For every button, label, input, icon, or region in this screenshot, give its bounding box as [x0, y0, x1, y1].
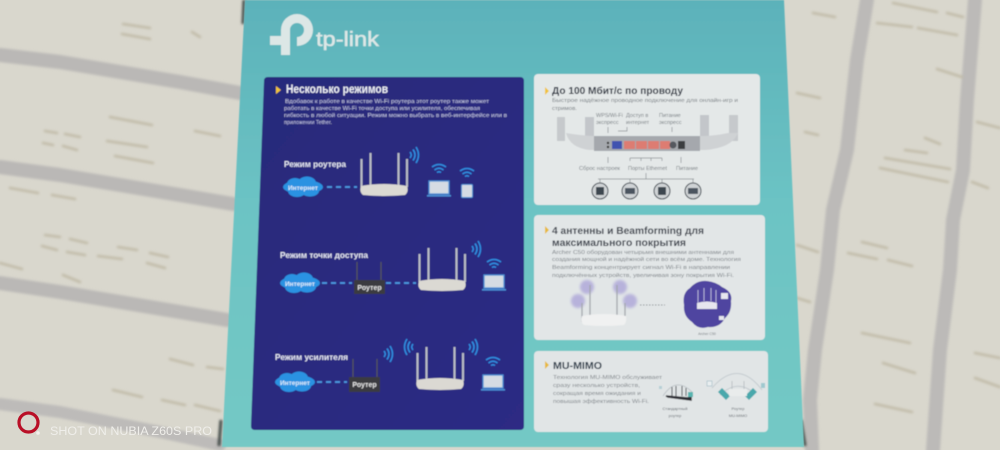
icon: internet cloud: Интернет — [285, 281, 315, 288]
diagram: router back panel — [557, 115, 738, 151]
watermark: shot on nubia — [19, 413, 212, 438]
icon: wifi over tablet — [460, 168, 474, 176]
diagram: standard router: роутер — [669, 413, 682, 418]
wordmark: tp-link — [316, 29, 380, 51]
text: MU-MIMO description: сокращая время ожидания и — [553, 391, 641, 397]
text: beamforming description: Beamforming концентрирует сигнал Wi-Fi в направлении — [552, 265, 730, 271]
text: modes description — [284, 99, 507, 126]
icon: white router — [416, 347, 464, 390]
text: beamforming description: создания мощной и надёжной сети во всём доме. Технология — [552, 256, 741, 263]
callouts: port labels: Питание — [676, 166, 698, 172]
icon: laptop — [481, 375, 505, 391]
diagram: router mode — [283, 147, 474, 198]
caption: standard router: Стандартный — [663, 406, 687, 411]
diagram: MU-MIMO router — [707, 373, 765, 418]
heading: antennas and beamforming — [552, 225, 704, 249]
text: beamforming description — [552, 250, 741, 279]
heading: MU-MIMO: MU-MIMO — [553, 360, 602, 372]
label: access point mode: Режим точки доступа — [280, 250, 368, 260]
diagram: MU-MIMO router: MU-MIMO — [729, 413, 747, 418]
caption: MU-MIMO router: Роутер — [732, 406, 745, 411]
diagram: access point mode — [280, 241, 506, 294]
icon: internet cloud: Интернет — [288, 185, 318, 192]
icon: internet cloud: Интернет — [280, 380, 310, 387]
watermark text: SHOT ON NUBIA Z60S PRO — [50, 426, 212, 438]
icon: tablet — [462, 184, 472, 198]
text: beamforming description: подключённых устройств, увеличивая зону покрытия Wi-Fi. — [552, 272, 734, 279]
icon: wifi over laptop — [432, 164, 446, 172]
callouts: port labels: Порты Ethernet — [628, 166, 667, 172]
icon: signal waves toward white router — [404, 339, 413, 355]
callouts: port labels: интернет — [626, 120, 650, 126]
logo: tp-link — [270, 14, 380, 55]
label: extender mode: Режим усилителя — [275, 352, 348, 362]
callouts: port labels: Сброс настроек — [579, 166, 621, 172]
icon: signal waves to laptop — [469, 339, 478, 355]
icon: yellow bullet — [545, 361, 549, 369]
heading: antennas and beamforming: максимального покрытия — [552, 237, 686, 249]
icon: internet cloud — [275, 372, 315, 392]
text: beamforming description: Archer C50 оборудован четырьмя внешними антеннами для — [552, 250, 734, 256]
panel: antennas and beamforming — [534, 215, 765, 340]
icon: internet cloud — [280, 272, 320, 293]
callouts: port labels: экспресс — [659, 120, 682, 126]
icons: device circles — [592, 183, 701, 199]
text: wired description — [552, 97, 738, 112]
label: router mode: Режим роутера — [284, 159, 346, 169]
icon: black router — [354, 262, 385, 294]
callouts: port labels: Питание — [659, 113, 681, 119]
icon: laptop — [427, 181, 451, 197]
icon: white router — [418, 248, 466, 291]
caption: Archer C50: Archer C50 — [698, 332, 716, 336]
icon: red ring — [19, 413, 40, 435]
text: MU-MIMO description: Технология MU-MIMO обслуживает — [553, 375, 662, 381]
diagram: purple coverage blob — [684, 281, 731, 336]
icon: black router: Роутер — [352, 382, 377, 389]
callouts: port labels: Доступ в — [626, 113, 648, 119]
icon: laptop — [482, 275, 506, 291]
text: wired description: Быстрое надёжное проводное подключение для онлайн-игр и — [552, 97, 738, 104]
icon: signal waves — [472, 241, 480, 257]
text: MU-MIMO description — [553, 375, 662, 405]
teal product box — [222, 0, 804, 447]
callouts: port labels: экспресс — [596, 120, 619, 126]
text: MU-MIMO description: сразу несколько устройств, — [553, 382, 640, 389]
text: modes description: гибкость в любой ситуации. Режим можно выбрать в веб-интерфейсе или в — [284, 112, 507, 119]
icon: router — [360, 153, 408, 196]
text: modes description: приложении Tether. — [284, 120, 332, 126]
icon: wifi over laptop — [486, 358, 500, 366]
callouts: port labels — [579, 113, 698, 183]
callouts: port labels: WPS/Wi-Fi — [596, 113, 623, 119]
heading: wired speed: До 100 Мбит/с по проводу — [552, 85, 683, 97]
icon: yellow bullet — [545, 226, 549, 234]
text: wired description: стримов. — [552, 106, 577, 112]
diagram: standard router — [659, 385, 693, 418]
icon: black router: Роутер — [357, 285, 382, 292]
icon: yellow bullet — [276, 86, 281, 94]
icon: tp-link mark — [270, 14, 313, 55]
text: MU-MIMO description: повышая эффективность Wi-Fi. — [553, 399, 649, 405]
heading: antennas and beamforming: 4 антенны и Beamforming для — [552, 225, 704, 237]
icon: signal waves from black router — [384, 346, 392, 362]
diagram: router with signal spheres — [571, 280, 637, 326]
text: modes description: Вдобавок к работе в качестве Wi-Fi роутера этот роутер также может — [285, 99, 489, 105]
icon: internet cloud — [283, 176, 323, 197]
panel: wired speed — [534, 74, 760, 205]
text: modes description: работать в качестве Wi-Fi точки доступа или усилителя, обеспечивая — [284, 106, 480, 112]
icon: black router — [349, 359, 380, 392]
diagram: range extender mode — [275, 339, 505, 392]
icon: yellow bullet — [545, 87, 549, 95]
heading: modes: Несколько режимов — [286, 84, 388, 96]
panel: multiple modes — [251, 77, 524, 430]
icon: signal waves — [410, 147, 418, 163]
box corner shadows — [219, 0, 805, 446]
panel: MU-MIMO — [534, 351, 768, 432]
icon: wifi over laptop — [487, 260, 501, 268]
